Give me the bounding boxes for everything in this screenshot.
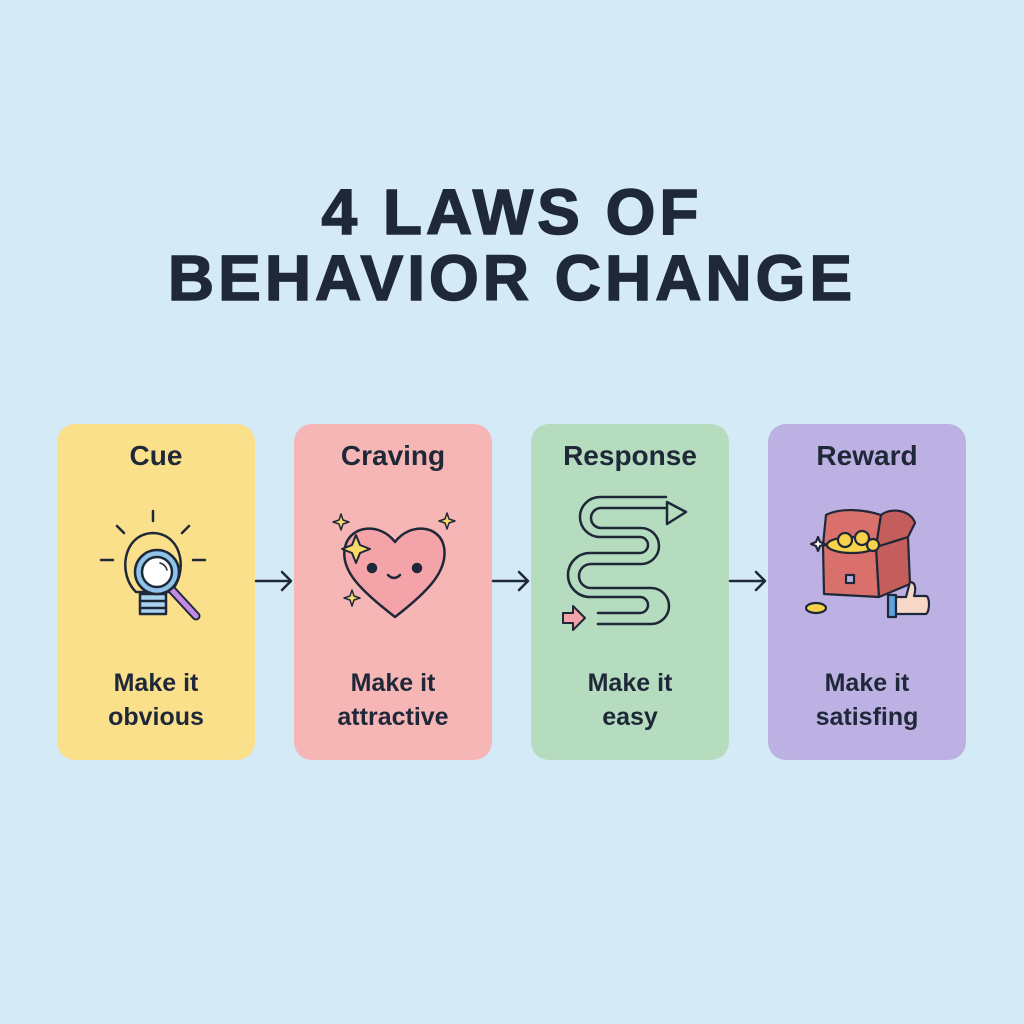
text: make it attractive (337, 669, 449, 731)
text: make it satisfing: Make it (825, 669, 909, 697)
title: 4 LAWS OF (322, 176, 702, 248)
heading: reward: Reward (816, 440, 918, 471)
icon: winding path arrow (563, 497, 686, 630)
text: make it easy (588, 669, 672, 731)
text: make it attractive: attractive (337, 703, 449, 731)
title (168, 176, 856, 314)
heading: cue: Cue (130, 440, 182, 471)
panel: cue (57, 424, 255, 760)
heading: craving: Craving (341, 440, 445, 471)
text: make it easy: easy (602, 703, 658, 731)
icon: treasure chest with thumbs up (806, 510, 929, 617)
text: make it obvious: obvious (108, 703, 204, 731)
text: make it satisfing: satisfing (816, 703, 918, 731)
title: BEHAVIOR CHANGE (168, 242, 856, 314)
icon: lightbulb with magnifier (101, 511, 205, 616)
arrow 3 (730, 572, 765, 590)
text: make it satisfing (816, 669, 918, 731)
arrow 1 (256, 572, 291, 590)
panel: reward (768, 424, 966, 760)
arrow 2 (493, 572, 528, 590)
panel: response (531, 424, 729, 760)
text: make it easy: Make it (588, 669, 672, 697)
panel: craving (294, 424, 492, 760)
text: make it obvious (108, 669, 204, 731)
text: make it obvious: Make it (114, 669, 198, 697)
text: make it attractive: Make it (351, 669, 435, 697)
heading: response: Response (563, 440, 697, 471)
icon: smiling heart (333, 513, 455, 617)
